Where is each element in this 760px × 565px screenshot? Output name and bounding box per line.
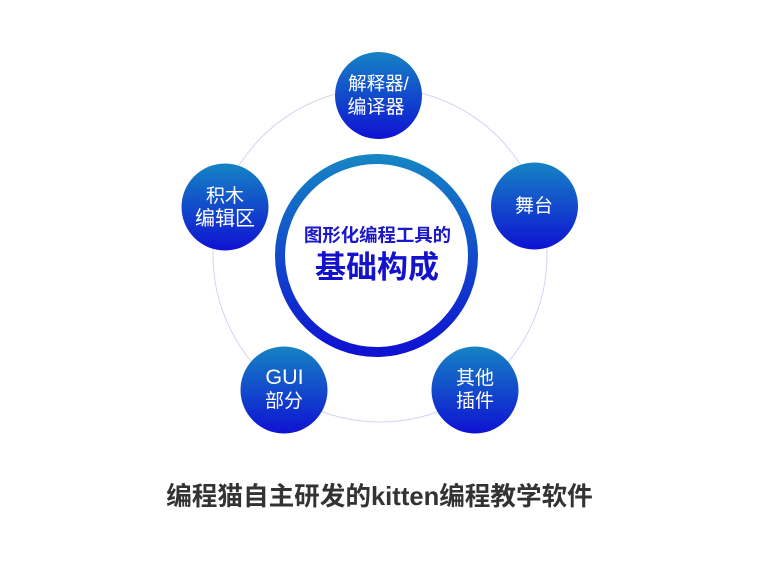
orbit ring: [213, 88, 547, 422]
node: GUI section: 部分: [265, 390, 303, 412]
node: block editor: 积木: [206, 185, 244, 207]
node: interpreter/compiler: 编译器: [347, 96, 405, 118]
node: stage: [491, 162, 578, 250]
node: block editor: 编辑区: [195, 207, 255, 230]
node: other plugins: 其他: [456, 367, 494, 389]
node: interpreter/compiler: 解释器/: [348, 73, 410, 94]
node: block editor: [182, 164, 268, 250]
caption: 编程猫自主研发的kitten编程教学软件: [166, 482, 593, 511]
node: stage: 舞台: [515, 195, 553, 217]
node: other plugins: 插件: [456, 390, 494, 412]
center heading line 2: 基础构成: [315, 250, 439, 285]
node: GUI section: [240, 346, 328, 434]
node: interpreter/compiler: [335, 52, 422, 139]
node: other plugins: [432, 346, 518, 434]
node: GUI section: GUI: [265, 365, 304, 389]
center ring: [280, 159, 473, 352]
center heading line 1: 图形化编程工具的: [304, 224, 451, 246]
